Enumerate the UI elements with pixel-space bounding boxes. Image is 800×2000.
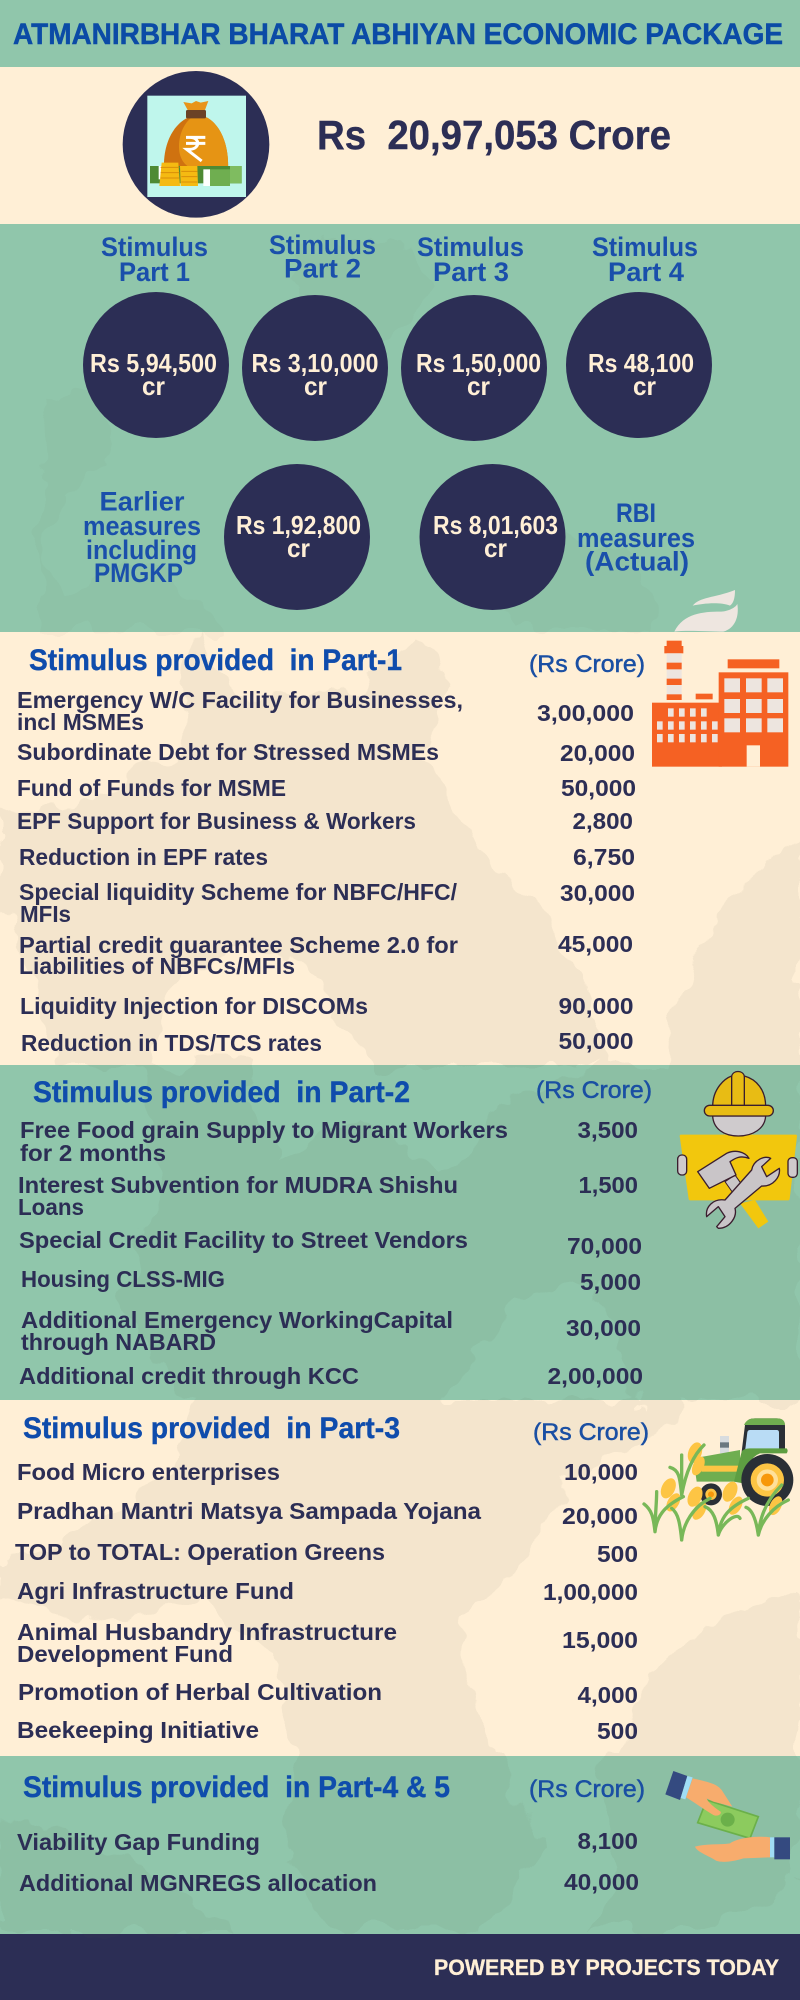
stimulus part 3: Rs 1,50,000 xyxy=(416,348,541,378)
stimulus part 4: Rs 48,100 xyxy=(588,348,694,378)
row: food micro enterprises xyxy=(17,1459,638,1485)
earlier measures: including xyxy=(86,535,197,565)
row: KCC: Additional credit through KCC xyxy=(19,1363,359,1389)
row: food micro enterprises: Food Micro enterprises xyxy=(17,1459,280,1485)
row: emergency W/C: Emergency W/C Facility for Businesses, xyxy=(17,687,463,713)
row: EPF support: EPF Support for Business & Workers xyxy=(17,808,416,834)
row: housing: 5,000 xyxy=(580,1269,641,1295)
row: herbal cultivation xyxy=(18,1679,638,1708)
total amount: Rs 20,97,053 Crore xyxy=(317,112,671,158)
row: agri infrastructure: 1,00,000 xyxy=(543,1579,638,1605)
panel: part 3 xyxy=(15,1412,649,1744)
earlier measures: PMGKP xyxy=(94,558,183,588)
unit label: (Rs Crore) xyxy=(536,1077,652,1104)
row: beekeeping: 500 xyxy=(597,1718,638,1744)
RBI measures xyxy=(420,464,695,610)
stimulus part 3: Part 3 xyxy=(433,257,509,287)
unit label: (Rs Crore) xyxy=(529,1776,645,1803)
row: agri infrastructure: Agri Infrastructure Fund xyxy=(17,1578,294,1604)
stimulus part 2 xyxy=(242,230,388,441)
row: EPF support: 2,800 xyxy=(572,808,633,834)
stimulus part 1: Part 1 xyxy=(119,257,190,287)
icon: tractor and corn xyxy=(644,1418,793,1540)
row: agri infrastructure xyxy=(17,1578,638,1605)
row: MGNREGS: 40,000 xyxy=(564,1869,639,1895)
row: viability gap funding: Viability Gap Funding xyxy=(17,1829,260,1855)
row: herbal cultivation: 4,000 xyxy=(578,1682,638,1708)
icon: factory with smoke xyxy=(652,590,788,767)
row: matsya sampada: Pradhan Mantri Matsya Sampada Yojana xyxy=(17,1498,482,1524)
stimulus part 4: Stimulus xyxy=(592,232,698,262)
row: TDS/TCS xyxy=(21,1028,634,1056)
row: animal husbandry: 15,000 xyxy=(562,1627,638,1653)
row: partial credit guarantee: Partial credit guarantee Scheme 2.0 for xyxy=(19,932,458,958)
row: street vendors xyxy=(19,1227,642,1259)
row: MGNREGS: Additional MGNREGS allocation xyxy=(19,1870,377,1896)
icon: hands exchanging money xyxy=(665,1771,790,1862)
row: NABARD: 30,000 xyxy=(566,1315,641,1341)
RBI measures: (Actual) xyxy=(585,546,689,576)
unit label: (Rs Crore) xyxy=(533,1419,649,1446)
stimulus part 1: Stimulus xyxy=(101,232,208,262)
row: TDS/TCS: 50,000 xyxy=(558,1028,634,1054)
earlier measures xyxy=(83,464,370,610)
stimulus part 2: cr xyxy=(304,371,327,401)
row: NABARD: Additional Emergency WorkingCapital xyxy=(21,1307,453,1333)
stimulus part 2: Rs 3,10,000 xyxy=(252,348,378,378)
heading: part 1: Stimulus provided in Part-1 xyxy=(29,644,402,677)
stimulus part 1: cr xyxy=(142,371,165,401)
RBI measures: measures xyxy=(577,523,695,553)
icon: worker with tools xyxy=(678,1071,797,1228)
row: street vendors: Special Credit Facility to Street Vendors xyxy=(19,1227,468,1253)
row: EPF support xyxy=(17,808,633,834)
row: animal husbandry xyxy=(17,1619,638,1667)
row: fund of funds: Fund of Funds for MSME xyxy=(17,775,286,801)
stimulus part 3: Stimulus xyxy=(417,232,524,262)
row: animal husbandry: Animal Husbandry Infrastructure xyxy=(17,1619,397,1645)
row: matsya sampada xyxy=(17,1498,638,1529)
row: free food grain: 3,500 xyxy=(578,1117,638,1143)
row: operation greens xyxy=(15,1539,638,1567)
stimulus part 3 xyxy=(401,232,547,441)
row: EPF rates: 6,750 xyxy=(573,844,635,870)
row: EPF rates: Reduction in EPF rates xyxy=(19,844,268,870)
stimulus part 4: Part 4 xyxy=(608,257,684,287)
row: food micro enterprises: 10,000 xyxy=(564,1459,638,1485)
row: free food grain: for 2 months xyxy=(20,1140,166,1166)
row: KCC xyxy=(19,1363,643,1389)
row: operation greens: TOP to TOTAL: Operation Greens xyxy=(15,1539,385,1565)
heading: part 3: Stimulus provided in Part-3 xyxy=(23,1412,400,1445)
row: DISCOMs: 90,000 xyxy=(558,993,634,1019)
earlier measures: measures xyxy=(83,511,201,541)
row: free food grain: Free Food grain Supply to Migrant Workers xyxy=(20,1117,508,1143)
row: special liquidity: 30,000 xyxy=(560,880,635,906)
row: matsya sampada: 20,000 xyxy=(562,1503,638,1529)
row: MUDRA: Interest Subvention for MUDRA Shishu xyxy=(18,1172,458,1198)
stimulus part 4: cr xyxy=(633,371,656,401)
background map watermark, lower panels xyxy=(0,632,800,1930)
row: DISCOMs: Liquidity Injection for DISCOMs xyxy=(20,993,368,1019)
row: KCC: 2,00,000 xyxy=(548,1363,643,1389)
row: beekeeping: Beekeeping Initiative xyxy=(17,1717,259,1743)
earlier measures: cr xyxy=(287,533,310,563)
row: special liquidity xyxy=(19,879,635,927)
panel: stimulus overview xyxy=(83,230,712,610)
row: emergency W/C: 3,00,000 xyxy=(537,700,634,726)
stimulus part 1: Rs 5,94,500 xyxy=(90,348,217,378)
row: housing xyxy=(21,1266,641,1295)
panel: part 2 xyxy=(18,1076,652,1389)
unit label: (Rs Crore) xyxy=(529,651,645,678)
RBI measures: cr xyxy=(484,533,507,563)
heading: part 4 and 5: Stimulus provided in Part-4 & 5 xyxy=(23,1771,450,1804)
row: housing: Housing CLSS-MIG xyxy=(21,1266,225,1292)
row: emergency W/C xyxy=(17,687,634,735)
heading: part 2: Stimulus provided in Part-2 xyxy=(33,1076,410,1109)
RBI measures: RBI xyxy=(616,498,656,528)
row: MGNREGS xyxy=(19,1869,639,1896)
row: viability gap funding xyxy=(17,1828,638,1855)
row: emergency W/C: incl MSMEs xyxy=(17,709,144,735)
row: animal husbandry: Development Fund xyxy=(17,1641,233,1667)
row: fund of funds: 50,000 xyxy=(561,775,636,801)
RBI measures: Rs 8,01,603 xyxy=(433,510,558,540)
earlier measures: Rs 1,92,800 xyxy=(236,510,361,540)
background map watermark, upper panel xyxy=(40,240,650,632)
footer credit: POWERED BY PROJECTS TODAY xyxy=(434,1955,779,1980)
stimulus part 2: Stimulus xyxy=(269,230,376,260)
stimulus part 3: cr xyxy=(467,371,490,401)
row: MUDRA: 1,500 xyxy=(578,1172,638,1198)
row: DISCOMs xyxy=(20,993,634,1019)
stimulus part 4 xyxy=(566,232,712,438)
earlier measures: Earlier xyxy=(100,486,185,516)
row: NABARD xyxy=(21,1307,641,1355)
row: partial credit guarantee: 45,000 xyxy=(558,931,633,957)
row: NABARD: through NABARD xyxy=(21,1329,216,1355)
icon: money bag in circle xyxy=(123,71,269,218)
row: MUDRA: Loans xyxy=(18,1194,84,1220)
panel: part 4 and 5 xyxy=(17,1771,645,1896)
row: partial credit guarantee xyxy=(19,931,633,979)
row: EPF rates xyxy=(19,844,635,870)
row: special liquidity: MFIs xyxy=(20,901,71,927)
row: street vendors: 70,000 xyxy=(567,1233,642,1259)
stimulus part 1 xyxy=(83,232,229,438)
row: partial credit guarantee: Liabilities of NBFCs/MFIs xyxy=(19,953,295,979)
row: free food grain xyxy=(20,1117,638,1166)
row: subordinate debt: 20,000 xyxy=(560,740,635,766)
row: beekeeping xyxy=(17,1717,638,1744)
row: TDS/TCS: Reduction in TDS/TCS rates xyxy=(21,1030,322,1056)
panel: part 1 xyxy=(17,644,645,1056)
row: viability gap funding: 8,100 xyxy=(578,1828,638,1854)
row: operation greens: 500 xyxy=(597,1541,638,1567)
row: MUDRA xyxy=(18,1172,638,1220)
row: fund of funds xyxy=(17,775,636,801)
stimulus part 2: Part 2 xyxy=(284,254,361,284)
row: herbal cultivation: Promotion of Herbal Cultivation xyxy=(18,1679,382,1705)
row: subordinate debt xyxy=(17,739,635,766)
row: special liquidity: Special liquidity Scheme for NBFC/HFC/ xyxy=(19,879,457,905)
row: subordinate debt: Subordinate Debt for Stressed MSMEs xyxy=(17,739,439,765)
